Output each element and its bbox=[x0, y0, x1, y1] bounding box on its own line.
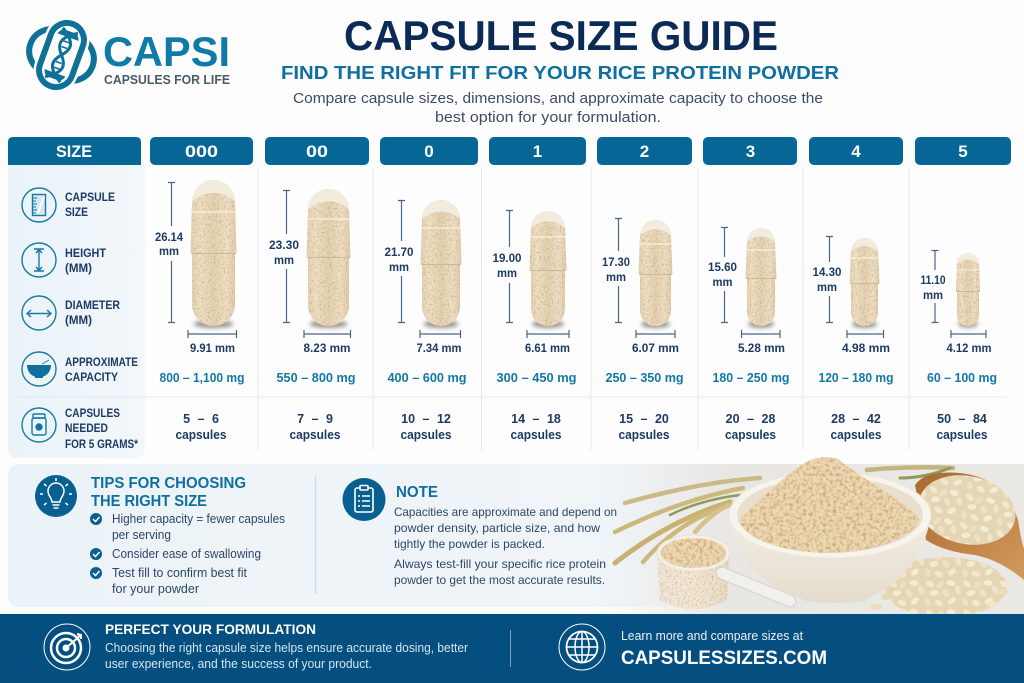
header row: 00 bbox=[306, 142, 328, 161]
footer text bbox=[105, 641, 468, 671]
capsule bbox=[956, 253, 980, 328]
footer link: CAPSULESSIZES.COM bbox=[621, 647, 827, 669]
panel: size table bbox=[8, 137, 1011, 458]
diameter measure: 4.12 mm bbox=[946, 341, 992, 355]
capsules needed bbox=[290, 412, 341, 442]
icon: capsule size ruler bbox=[22, 188, 56, 222]
capsules needed bbox=[618, 412, 670, 442]
column: size 4 bbox=[812, 236, 894, 442]
capsules needed bbox=[400, 412, 452, 442]
bowl bbox=[729, 457, 931, 603]
capsule bbox=[306, 189, 350, 328]
column: size 00 bbox=[269, 189, 356, 442]
footer heading: PERFECT YOUR FORMULATION bbox=[105, 621, 316, 637]
logo tagline: CAPSULES FOR LIFE bbox=[104, 73, 230, 87]
height measure bbox=[920, 250, 946, 322]
header row: 5 bbox=[958, 142, 968, 161]
diameter measure: 6.61 mm bbox=[525, 341, 570, 355]
height measure: 17.30 bbox=[602, 255, 630, 269]
icon: height arrow bbox=[22, 243, 56, 277]
tip: higher capacity: per serving bbox=[112, 528, 171, 542]
tip: ease of swallowing: Consider ease of swallowing bbox=[112, 547, 261, 561]
diameter measure bbox=[738, 330, 785, 355]
height measure: 15.60 bbox=[708, 260, 737, 274]
logo bbox=[19, 13, 230, 97]
column: size 3 bbox=[708, 228, 790, 442]
label: capsule size: SIZE bbox=[65, 207, 88, 219]
label: height: (MM) bbox=[65, 263, 92, 275]
height measure bbox=[602, 218, 630, 322]
capacity: 300 – 450 mg bbox=[496, 371, 576, 385]
scoop bbox=[657, 535, 790, 609]
icon: capacity bowl bbox=[22, 352, 56, 386]
capsules needed: capsules bbox=[510, 428, 562, 442]
label: capsule size: CAPSULE bbox=[65, 192, 115, 204]
label: capacity: APPROXIMATE bbox=[65, 357, 138, 369]
tips heading: TIPS FOR CHOOSING bbox=[91, 475, 246, 492]
diameter measure: 5.28 mm bbox=[738, 341, 785, 355]
capsule bbox=[746, 228, 776, 328]
capacity: 250 – 350 mg bbox=[606, 371, 684, 385]
note text: Capacities are approximate and depend on bbox=[394, 505, 617, 519]
label: height: HEIGHT bbox=[65, 248, 106, 260]
height measure: 26.14 bbox=[155, 230, 183, 244]
height measure: mm bbox=[274, 253, 294, 267]
intro text: Compare capsule sizes, dimensions, and approximate capacity to choose the bbox=[293, 90, 823, 107]
height measure: mm bbox=[712, 275, 732, 289]
label: capacity bbox=[65, 357, 138, 384]
label: diameter: DIAMETER bbox=[65, 300, 121, 312]
column: size 0 bbox=[384, 200, 466, 442]
height measure bbox=[269, 190, 299, 322]
capsules needed: capsules bbox=[618, 428, 670, 442]
diameter measure: 7.34 mm bbox=[416, 341, 462, 355]
capsules needed: 14 – 18 bbox=[511, 412, 561, 426]
rice pile bbox=[870, 557, 1009, 617]
capsule bbox=[850, 238, 880, 328]
photo: rice protein powder bbox=[600, 457, 1024, 617]
height measure: mm bbox=[817, 280, 837, 294]
header row: SIZE bbox=[56, 142, 92, 161]
header row: 000 bbox=[185, 142, 218, 161]
subtitle: FIND THE RIGHT FIT FOR YOUR RICE PROTEIN POWDER bbox=[281, 62, 839, 83]
height measure: 11.10 bbox=[920, 273, 946, 287]
diameter measure: 8.23 mm bbox=[304, 341, 350, 355]
capsules needed: 5 – 6 bbox=[183, 412, 219, 426]
icon: target bbox=[44, 624, 90, 670]
icon: diameter arrow bbox=[22, 296, 56, 330]
label: capacity: CAPACITY bbox=[65, 372, 118, 384]
label: capsules needed bbox=[65, 408, 138, 451]
capsule bbox=[420, 200, 462, 328]
tip: test fill: Test fill to confirm best fit bbox=[112, 566, 248, 580]
capsules needed bbox=[830, 412, 882, 442]
footer text: user experience, and the success of your product. bbox=[105, 657, 372, 671]
logo mark bbox=[19, 13, 104, 97]
capsules needed: capsules bbox=[725, 428, 776, 442]
capsule bbox=[190, 180, 236, 328]
capsules needed bbox=[510, 412, 562, 442]
note text bbox=[394, 505, 617, 587]
height measure: mm bbox=[389, 260, 409, 274]
capsules needed bbox=[936, 412, 988, 442]
intro text: best option for your formulation. bbox=[435, 109, 661, 126]
diameter measure bbox=[188, 330, 236, 355]
capsules needed: 20 – 28 bbox=[726, 412, 775, 426]
tip: higher capacity bbox=[90, 512, 285, 542]
capsules needed: 28 – 42 bbox=[831, 412, 881, 426]
capsules needed: 10 – 12 bbox=[401, 412, 451, 426]
diameter measure: 9.91 mm bbox=[190, 341, 235, 355]
wooden spoon bbox=[912, 467, 1024, 580]
panel: tips and note background bbox=[8, 464, 1024, 607]
capsules needed: 15 – 20 bbox=[619, 412, 669, 426]
capsules needed: capsules bbox=[830, 428, 882, 442]
diameter measure bbox=[632, 330, 679, 355]
intro text bbox=[293, 90, 823, 126]
diameter measure: 6.07 mm bbox=[632, 341, 679, 355]
footer text: Choosing the right capsule size helps ensure accurate dosing, better bbox=[105, 641, 468, 655]
capsules needed: 50 – 84 bbox=[937, 412, 987, 426]
icon: clipboard bbox=[342, 478, 386, 521]
height measure bbox=[812, 236, 842, 322]
tip: higher capacity: Higher capacity = fewer capsules bbox=[112, 512, 285, 526]
capsules needed: capsules bbox=[400, 428, 452, 442]
diameter measure bbox=[525, 330, 570, 355]
tips heading: THE RIGHT SIZE bbox=[91, 493, 207, 510]
label: capsules needed: NEEDED bbox=[65, 423, 108, 435]
height measure bbox=[492, 210, 522, 322]
diameter measure bbox=[304, 330, 350, 355]
label: diameter: (MM) bbox=[65, 315, 92, 327]
capsules needed bbox=[176, 412, 227, 442]
label: capsule size bbox=[65, 192, 115, 219]
height measure bbox=[155, 182, 183, 322]
label: height bbox=[65, 248, 106, 275]
height measure: 21.70 bbox=[384, 245, 414, 259]
note heading: NOTE bbox=[396, 484, 438, 501]
tip: test fill bbox=[90, 566, 248, 596]
capsules needed: capsules bbox=[176, 428, 227, 442]
note text: powder density, particle size, and how bbox=[394, 521, 600, 535]
capsule bbox=[530, 211, 566, 328]
tips heading bbox=[91, 475, 246, 510]
height measure: 23.30 bbox=[269, 238, 299, 252]
logo wordmark: CAPSI bbox=[103, 28, 230, 75]
diameter measure bbox=[416, 330, 462, 355]
header row: 3 bbox=[746, 142, 755, 161]
diameter measure: 4.98 mm bbox=[842, 341, 890, 355]
label: capsules needed: FOR 5 GRAMS* bbox=[65, 439, 138, 451]
capacity: 180 – 250 mg bbox=[712, 371, 790, 385]
height measure bbox=[384, 200, 414, 322]
column: size 1 bbox=[492, 210, 576, 442]
height measure bbox=[708, 228, 737, 322]
title: CAPSULE SIZE GUIDE bbox=[344, 12, 778, 59]
label: capsules needed: CAPSULES bbox=[65, 408, 120, 420]
icon: capsule jar bbox=[22, 408, 56, 442]
header row: 0 bbox=[424, 142, 434, 161]
capsules needed: capsules bbox=[290, 428, 341, 442]
capacity: 400 – 600 mg bbox=[388, 371, 466, 385]
header row: 2 bbox=[640, 142, 649, 161]
panel: tips bbox=[35, 475, 285, 596]
icon: light bulb bbox=[35, 475, 77, 517]
tip: test fill: for your powder bbox=[112, 582, 199, 596]
column: size 2 bbox=[602, 218, 684, 442]
header row: 1 bbox=[533, 142, 542, 161]
height measure: 14.30 bbox=[812, 265, 842, 279]
note text: tightly the powder is packed. bbox=[394, 537, 545, 551]
diameter measure bbox=[842, 330, 890, 355]
column: size 5 bbox=[920, 250, 997, 442]
height measure: mm bbox=[159, 244, 179, 258]
capsule bbox=[638, 220, 672, 328]
capsules needed: 7 – 9 bbox=[297, 412, 333, 426]
header row: 4 bbox=[851, 142, 861, 161]
capacity: 550 – 800 mg bbox=[276, 371, 356, 385]
diameter measure bbox=[946, 330, 992, 355]
capacity: 120 – 180 mg bbox=[818, 371, 894, 385]
icon: globe bbox=[559, 624, 605, 670]
panel: row labels background bbox=[8, 165, 145, 458]
footer band bbox=[0, 614, 1024, 683]
height measure: 19.00 bbox=[492, 251, 522, 265]
height measure: mm bbox=[923, 288, 943, 302]
panel: note bbox=[342, 478, 617, 587]
header row bbox=[8, 137, 1011, 165]
capacity: 60 – 100 mg bbox=[927, 371, 997, 385]
column: size 000 bbox=[155, 180, 244, 442]
height measure: mm bbox=[497, 266, 517, 280]
rice stalks bbox=[615, 467, 953, 563]
powder mound bbox=[739, 457, 920, 553]
note text: Always test-fill your specific rice protein bbox=[394, 557, 606, 571]
label: diameter bbox=[65, 300, 121, 327]
capsules needed bbox=[725, 412, 776, 442]
capacity: 800 – 1,100 mg bbox=[160, 371, 244, 385]
capsules needed: capsules bbox=[936, 428, 988, 442]
note text: powder to get the most accurate results. bbox=[394, 573, 605, 587]
height measure: mm bbox=[606, 270, 626, 284]
footer link intro: Learn more and compare sizes at bbox=[621, 628, 803, 643]
